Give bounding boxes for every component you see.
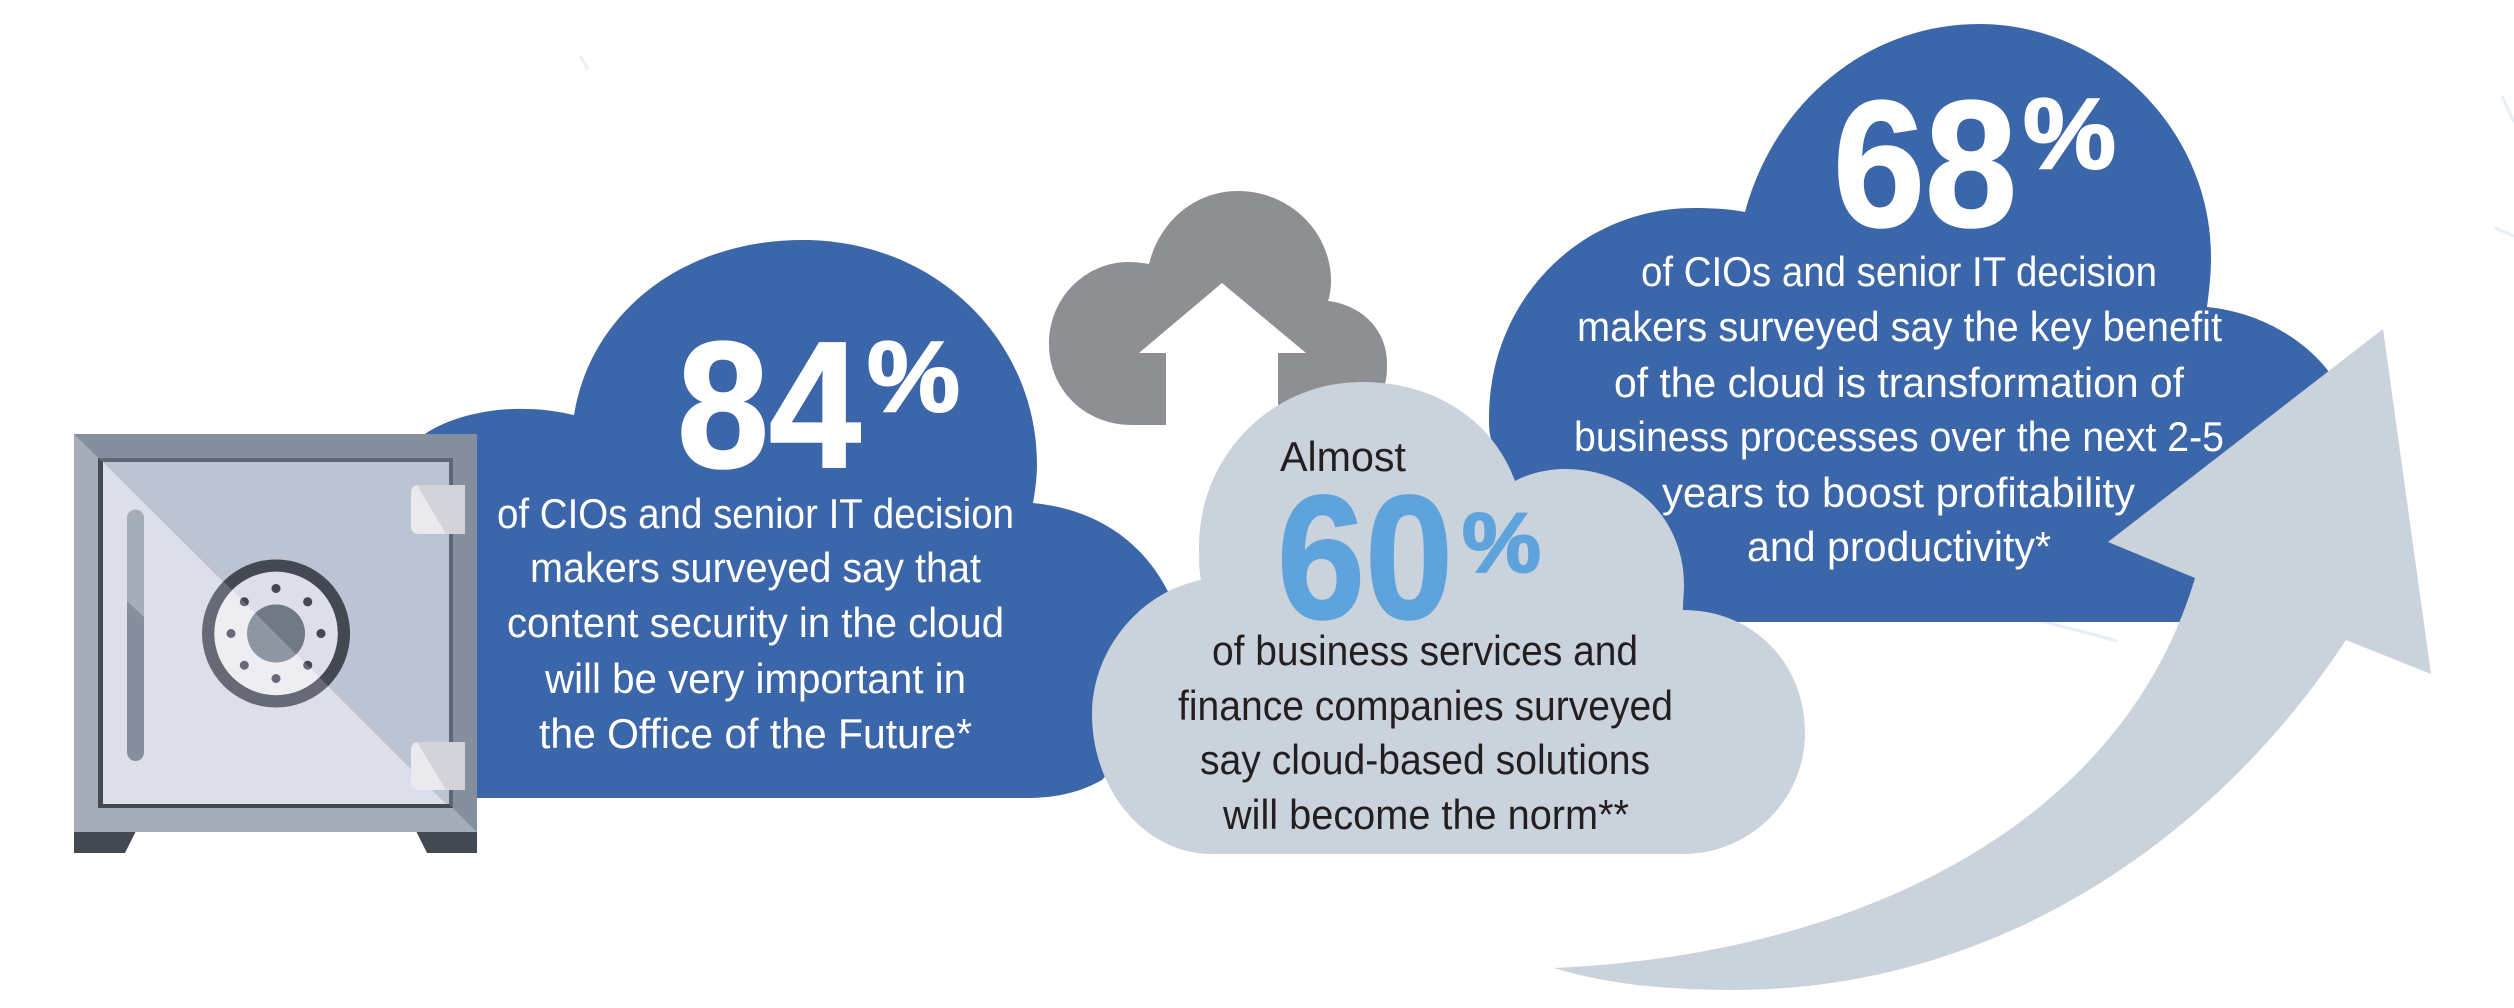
text: 60% description: of business services and bbox=[1212, 627, 1638, 674]
text: 60% description: will become the norm** bbox=[1222, 791, 1629, 838]
safe hinge: bottom bbox=[411, 742, 465, 790]
stat: 60%: 60 bbox=[1277, 460, 1453, 656]
text: 68% description: and productivity* bbox=[1747, 523, 2051, 570]
text: 84% description: of CIOs and senior IT decision bbox=[497, 490, 1014, 537]
text: 84% description: makers surveyed say that bbox=[530, 544, 981, 591]
stat: 68%: % bbox=[2023, 78, 2116, 190]
cloud shape: 60% bbox=[1092, 382, 1805, 854]
safe body bbox=[74, 434, 477, 832]
label: Almost: Almost bbox=[1280, 433, 1406, 480]
text: 60% description: say cloud-based solutions bbox=[1200, 736, 1650, 783]
text: 68% description: of CIOs and senior IT decision bbox=[1641, 248, 2157, 295]
stat: 60%: % bbox=[1462, 496, 1541, 590]
safe handle bbox=[127, 510, 144, 761]
panel: 84% cloud bbox=[400, 240, 1172, 798]
stat: 68%: 68 bbox=[1833, 64, 2017, 265]
text: 68% description: years to boost profitability bbox=[1662, 469, 2135, 516]
cloud shape: 68% bbox=[1489, 24, 2340, 622]
safe hinge: top bbox=[411, 485, 465, 534]
text: 60% description bbox=[1178, 627, 1673, 838]
stat: 84%: 84 bbox=[677, 305, 861, 506]
safe door bbox=[103, 462, 449, 804]
safe feet bbox=[74, 825, 477, 853]
icon: safe bbox=[74, 434, 477, 853]
text: 68% description: of the cloud is transformation of bbox=[1614, 359, 2184, 406]
safe dial bbox=[202, 560, 350, 708]
text: 84% description: the Office of the Future* bbox=[539, 710, 972, 757]
stat: 84%: % bbox=[867, 321, 960, 433]
text: 84% description bbox=[497, 490, 1014, 757]
cloud shape: 84% bbox=[400, 240, 1172, 798]
arrow: rising curved arrow bbox=[1554, 329, 2431, 990]
text: 68% description bbox=[1574, 248, 2224, 570]
panel: 60% cloud bbox=[1092, 382, 1805, 854]
text: 68% description: makers surveyed say the key benefit bbox=[1577, 303, 2222, 350]
text: 68% description: business processes over the next 2-5 bbox=[1574, 413, 2224, 460]
text: 84% description: content security in the cloud bbox=[507, 599, 1004, 646]
text: 60% description: finance companies surveyed bbox=[1178, 682, 1673, 729]
panel: 68% cloud bbox=[1489, 24, 2340, 622]
icon: grey cloud with upload arrow bbox=[1049, 191, 1387, 425]
text: 84% description: will be very important in bbox=[544, 655, 966, 702]
